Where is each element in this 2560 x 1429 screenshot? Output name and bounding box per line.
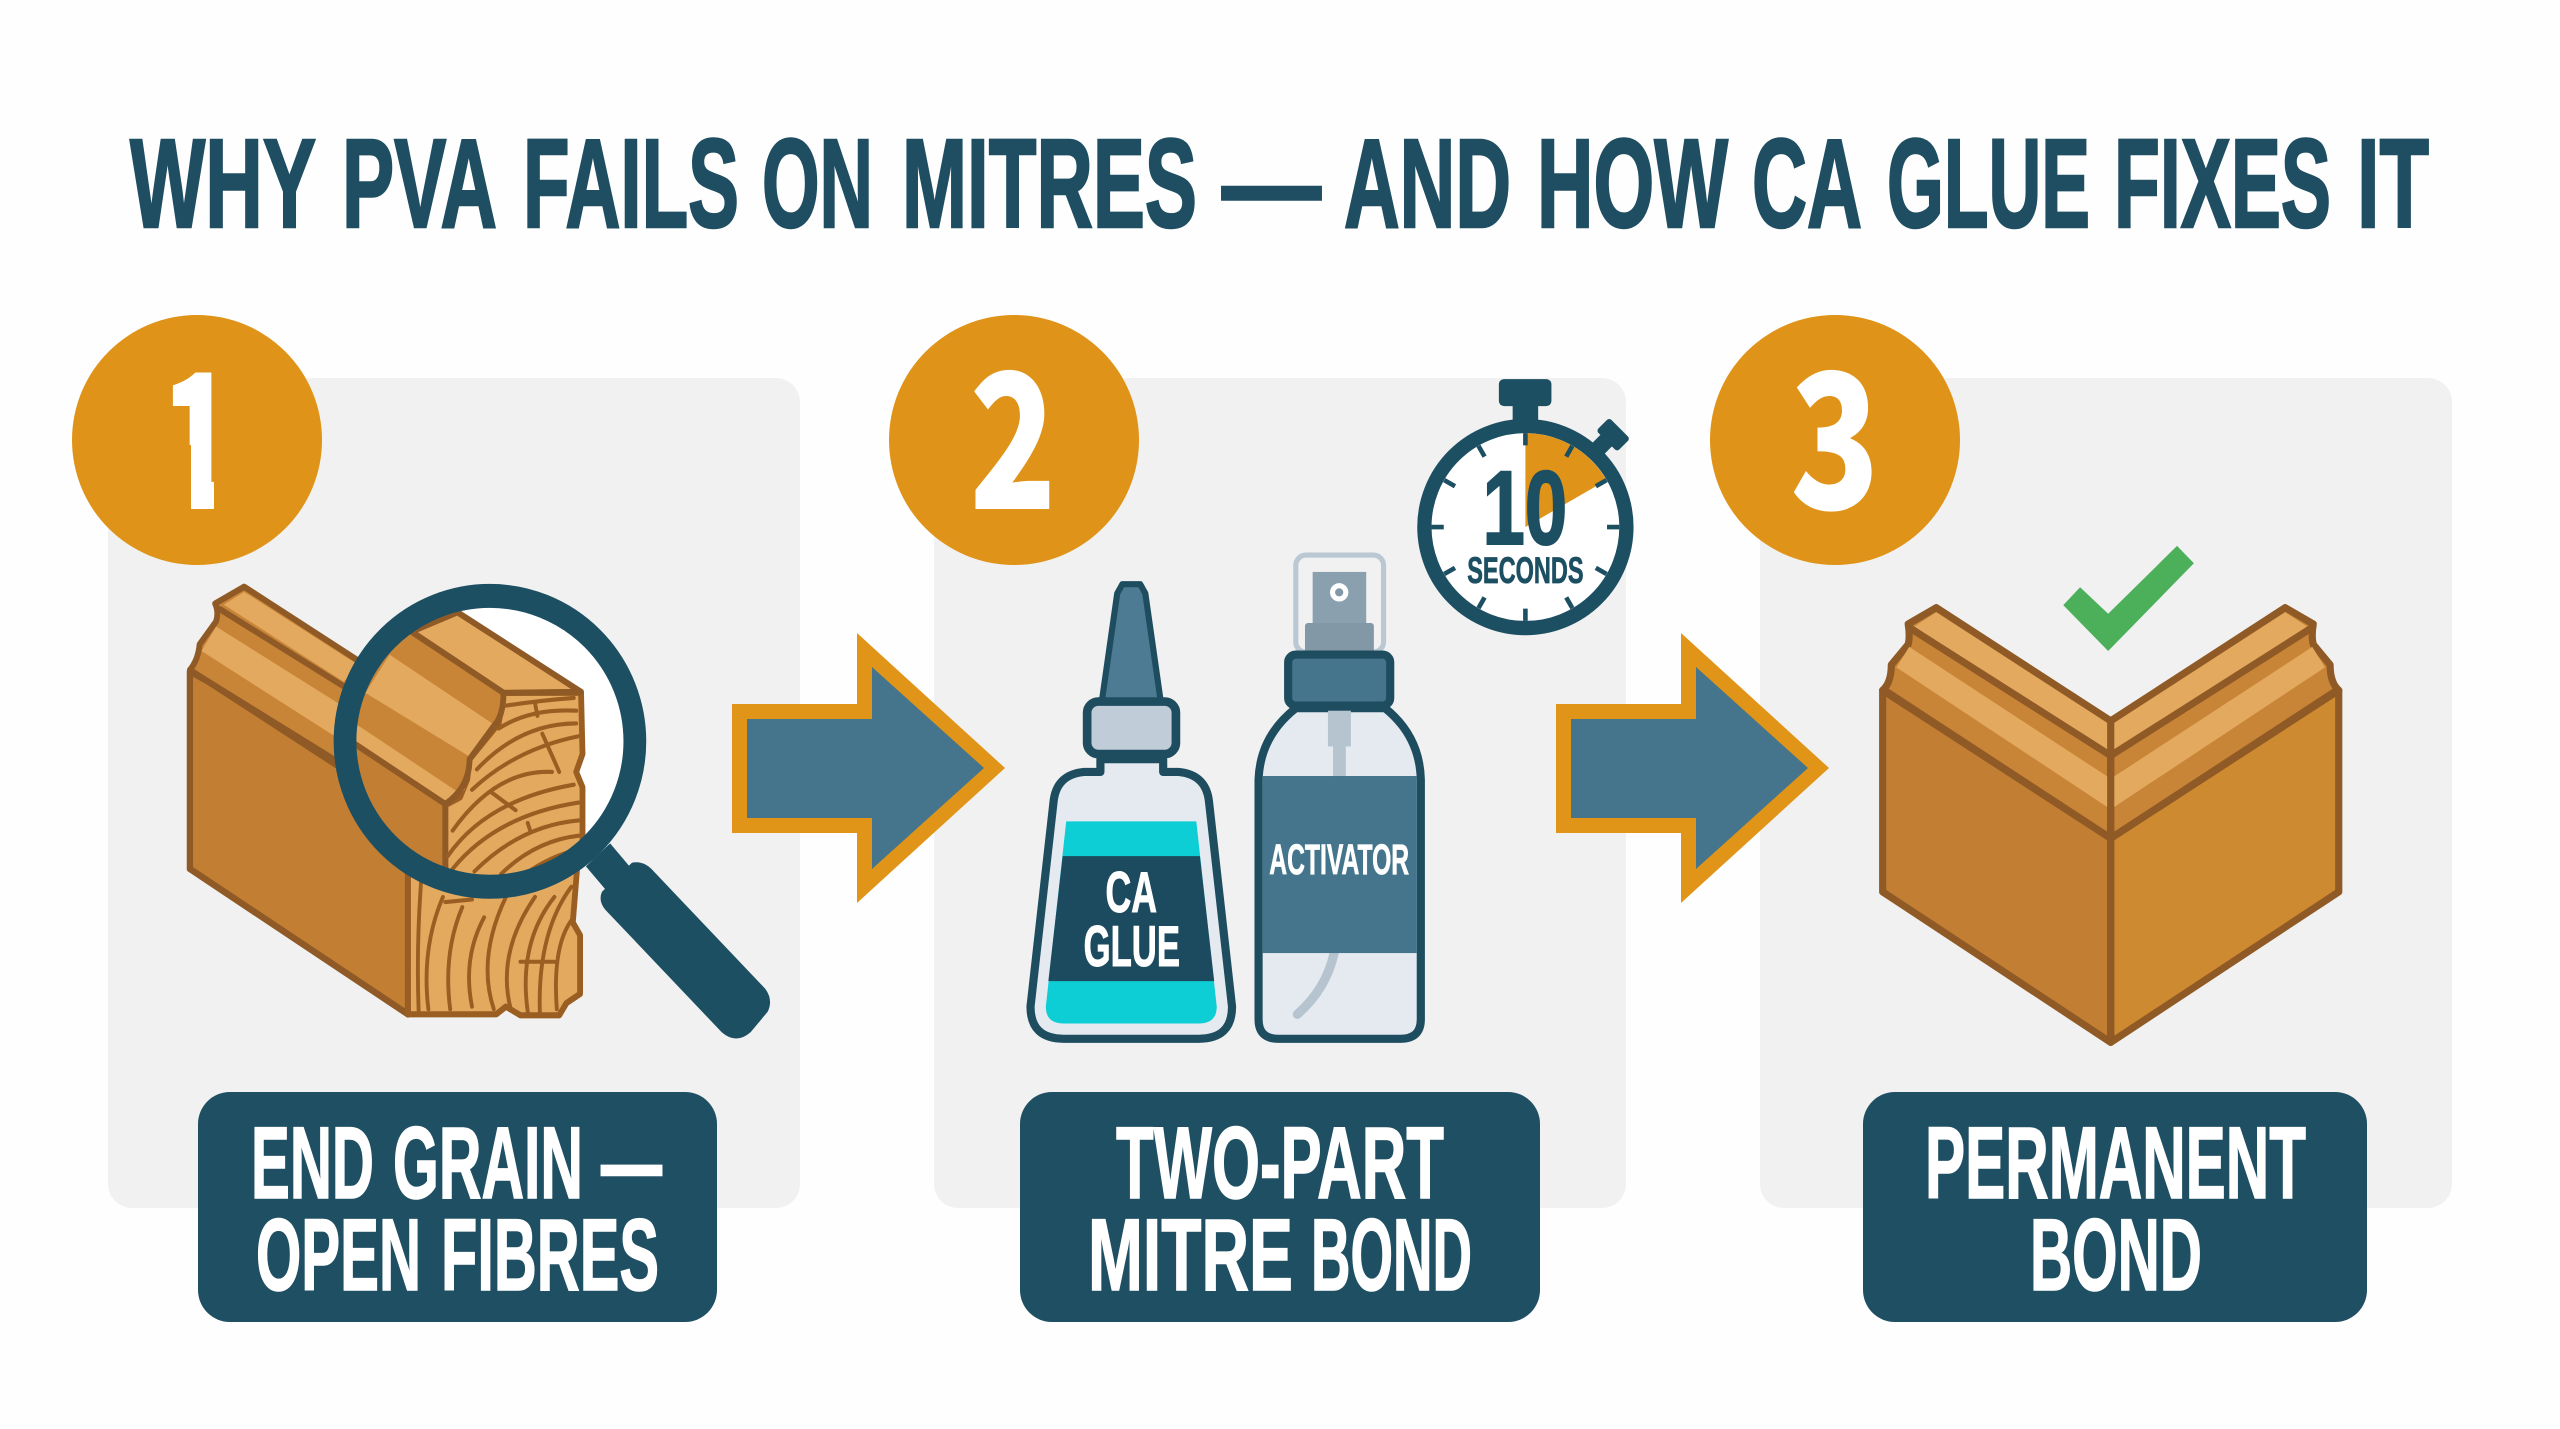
title: ON — [762, 113, 873, 254]
title: CA — [1752, 113, 1862, 254]
arrow: step 1 to step 2 — [732, 633, 1005, 903]
icon: green check mark — [2063, 546, 2194, 651]
caption pill 2: TWO-PART — [1116, 1106, 1444, 1220]
panel background — [934, 378, 1626, 1208]
number badge 2: 2 — [969, 292, 1057, 564]
caption pill 2: MITRE — [1088, 1198, 1293, 1312]
title: PVA — [342, 113, 497, 254]
title: MITRES — [902, 113, 1197, 254]
caption pill 3: PERMANENT — [1925, 1106, 2306, 1220]
icon: activator spray bottle: ACTIVATOR — [1269, 836, 1409, 883]
caption pill 1: END — [251, 1106, 374, 1220]
caption pill 1: GRAIN — [393, 1106, 583, 1220]
caption pill 3 — [1863, 1092, 2367, 1322]
caption pill 3: BOND — [2030, 1198, 2202, 1312]
number badge 1 — [72, 291, 322, 565]
icon: activator spray bottle — [1259, 555, 1421, 1039]
title: FAILS — [523, 113, 739, 254]
number badge 2 — [889, 292, 1139, 565]
icon: CA glue bottle — [1031, 584, 1232, 1039]
icon: moulding with magnifier — [190, 587, 770, 1039]
title — [130, 113, 2429, 254]
title: — — [1222, 113, 1321, 254]
caption pill 1: — — [601, 1106, 662, 1220]
panel: step 3 permanent bond — [1710, 290, 2452, 1322]
caption pill 1: OPEN — [256, 1198, 421, 1312]
icon: joined mitre corner — [1883, 608, 2339, 1042]
icon: 10 seconds stopwatch — [1424, 379, 1630, 628]
title: HOW — [1537, 113, 1728, 254]
number badge 1: 1 — [161, 291, 235, 564]
title: FIXES — [2114, 113, 2331, 254]
panel: step 2 two-part bond — [889, 292, 1630, 1322]
caption pill 1: FIBRES — [441, 1198, 659, 1312]
caption pill 2 — [1020, 1092, 1540, 1322]
number badge 3: 3 — [1790, 290, 1880, 564]
icon: CA glue bottle: GLUE — [1084, 915, 1180, 979]
title: WHY — [130, 113, 316, 254]
icon: CA glue bottle: CA — [1106, 861, 1157, 925]
panel background — [1760, 378, 2452, 1208]
caption pill 1 — [198, 1092, 717, 1322]
title: AND — [1344, 113, 1511, 254]
arrow: step 2 to step 3 — [1556, 633, 1829, 903]
icon: 10 seconds stopwatch: SECONDS — [1467, 549, 1584, 591]
icon: 10 seconds stopwatch: 10 — [1483, 450, 1567, 567]
title: GLUE — [1887, 113, 2090, 254]
title: IT — [2357, 113, 2429, 254]
panel: step 1 end grain — [72, 291, 800, 1322]
caption pill 2: BOND — [1311, 1198, 1472, 1312]
number badge 3 — [1710, 290, 1960, 565]
panel background — [108, 378, 800, 1208]
infographic canvas — [72, 137, 2452, 1322]
